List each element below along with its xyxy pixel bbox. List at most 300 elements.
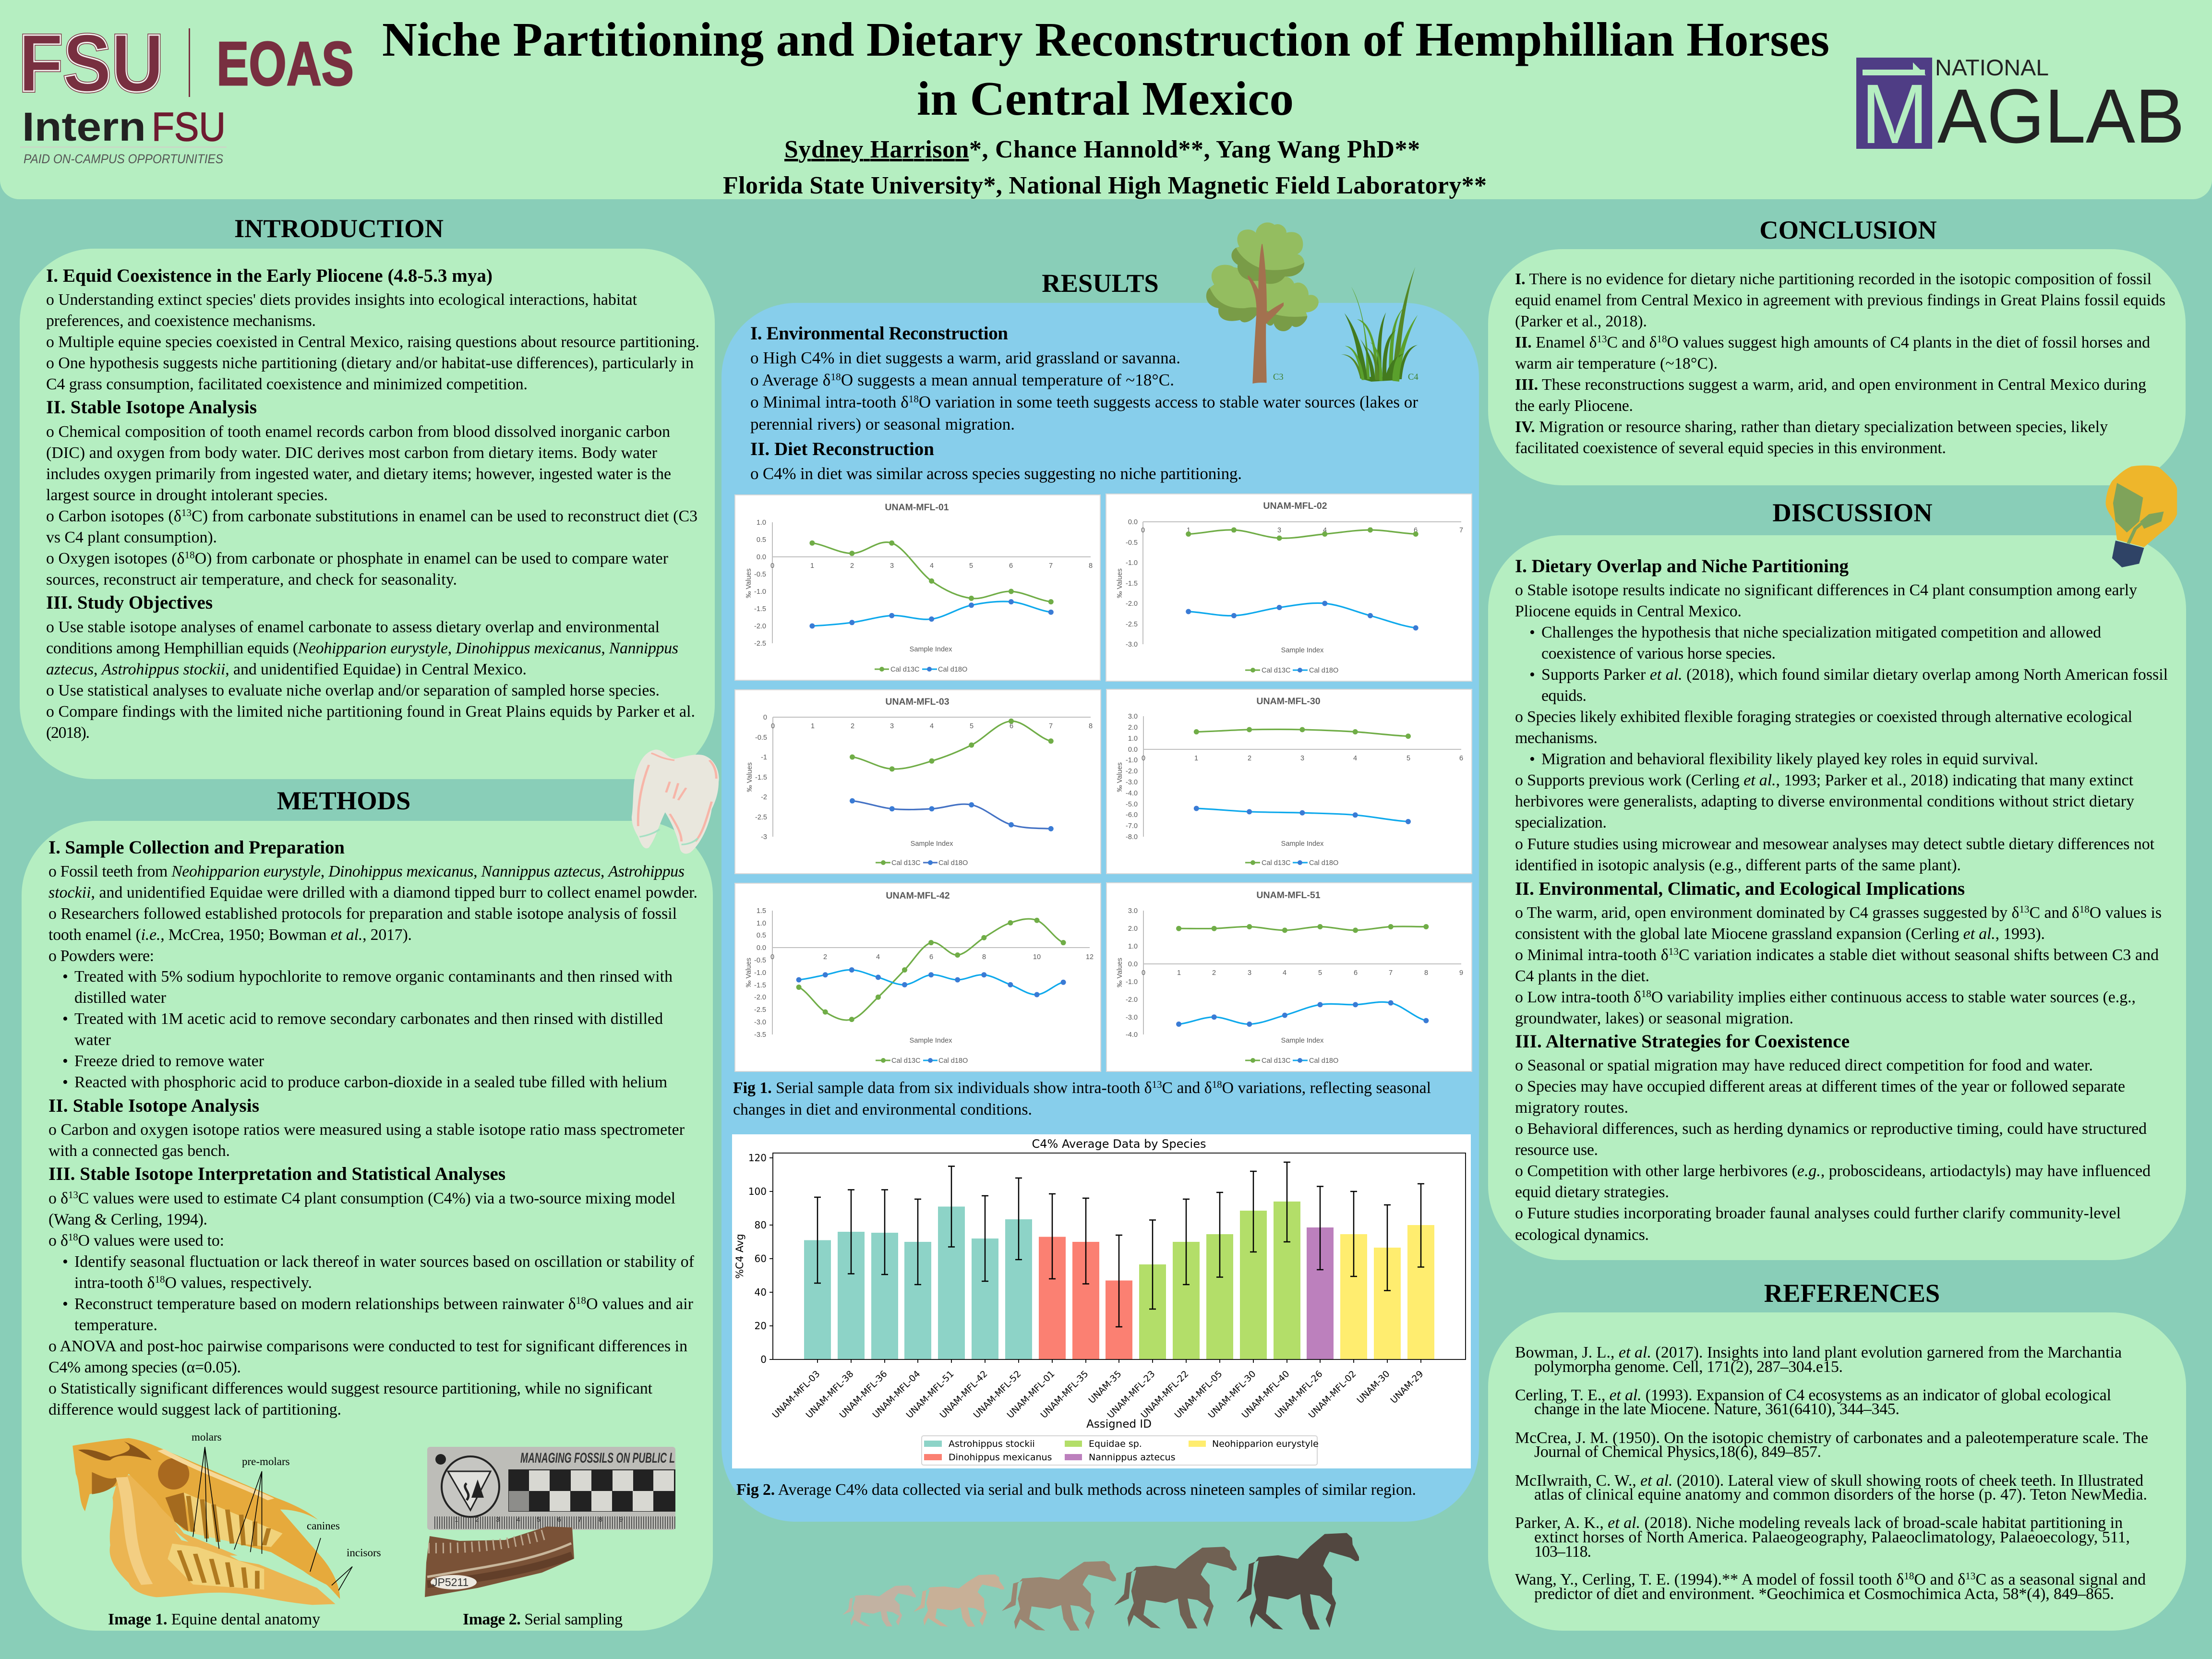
text block: equid coexistence: o Multiple equine species coexisted in Central Mexico, raising questions about resource partitioning.	[46, 333, 699, 351]
caption: image 1: Image 1. Equine dental anatomy	[108, 1611, 320, 1628]
panel: references: 103–118.	[1534, 1543, 1591, 1561]
line chart: UNAM-MFL-51: 0123456789	[1142, 969, 1463, 977]
label: incisors: incisors	[347, 1547, 381, 1559]
text block: sample collection: Treated with 1M acetic acid to remove secondary carbonates and then rinsed with distilled	[74, 1010, 663, 1028]
line chart: UNAM-MFL-42: -3.5	[754, 1031, 766, 1039]
line chart: UNAM-MFL-02: Sample Index	[1281, 647, 1324, 654]
subheading: sample collection: I. Sample Collection and Preparation	[48, 837, 345, 858]
text block: diet reconstruction: o C4% in diet was similar across species suggesting no niche partitioning.	[750, 464, 1242, 483]
image: scale bar and fossil tooth: 123456789	[455, 1515, 623, 1523]
line chart: UNAM-MFL-51: UNAM-MFL-51	[1256, 890, 1321, 901]
text block: interpretation: 13	[68, 1189, 78, 1201]
panel: conclusion: C and δ	[1607, 334, 1657, 351]
text block: environmental reconstruction: o Average δ	[750, 371, 830, 389]
caption: figure 1: C and δ	[1162, 1079, 1212, 1097]
x axis tick labels: UNAM-MFL-40	[1240, 1369, 1292, 1420]
line chart: UNAM-MFL-30: -5.0	[1126, 801, 1138, 808]
line chart: UNAM-MFL-02: -2.0	[1126, 600, 1138, 608]
x axis tick labels: UNAM-MFL-04	[871, 1369, 923, 1420]
text block: sample collection: o Researchers followed established protocols for preparation and stable isotope analysis of fossil	[48, 905, 677, 923]
line chart: UNAM-MFL-01: ‰ Values	[745, 568, 753, 598]
text block: stable isotope analysis: o Carbon isotopes (δ	[46, 507, 181, 525]
label: molars: molars	[192, 1431, 222, 1443]
text block: interpretation: O values were used to:	[78, 1232, 224, 1250]
line chart: UNAM-MFL-01: Cal d18O	[938, 666, 967, 673]
line chart: UNAM-MFL-51: Sample Index	[1281, 1037, 1324, 1045]
panel: references: polymorpha genome. Cell, 171(2), 287–304.e15.	[1534, 1358, 1843, 1376]
text block: dietary overlap: Supports Parker et al. (2018), which found similar dietary overlap among North American fossil	[1541, 666, 2168, 684]
text block: study objectives: o Use statistical analyses to evaluate niche overlap and/or separation of sampled horse species.	[46, 682, 660, 699]
panel: discussion	[1488, 535, 2186, 1260]
text block: interpretation: 18	[576, 1295, 586, 1306]
text block: environmental implications: groundwater, lakes) or seasonal migration.	[1515, 1010, 1793, 1027]
text block: interpretation: C4% among species (α=0.05).	[48, 1358, 241, 1376]
line chart: UNAM-MFL-01: Sample Index	[910, 646, 952, 653]
text block: environmental reconstruction: O suggests a mean annual temperature of ~18°C.	[841, 371, 1174, 389]
text block: study objectives: aztecus, Astrohippus stockii, and unidentified Equidae) in Central Mexico.	[46, 661, 527, 678]
text block: environmental implications: C4 plants in the diet.	[1515, 967, 1649, 985]
logo: National MagLab	[1856, 55, 2185, 161]
panel: conclusion: equid enamel from Central Mexico in agreement with previous findings in Great Plains fossil equids	[1515, 291, 2165, 309]
subheading: stable isotope analysis: II. Stable Isotope Analysis	[48, 1095, 259, 1116]
text block: stable isotope analysis: vs C4 plant consumption).	[46, 529, 217, 546]
text block: interpretation: Reconstruct temperature based on modern relationships between rainwater δ	[74, 1295, 576, 1313]
text block: equid coexistence: preferences, and coexistence mechanisms.	[46, 312, 316, 330]
subheading: alternative strategies: III. Alternative Strategies for Coexistence	[1515, 1031, 1850, 1052]
text block: sample collection: o Fossil teeth from Neohipparion eurystyle, Dinohippus mexicanus, Nannippus aztecus, Astrohippus	[48, 863, 685, 880]
text block: dietary overlap: •	[1529, 750, 1535, 768]
text block: environmental reconstruction: 18	[830, 371, 841, 383]
icon: tree C3	[1206, 222, 1319, 384]
x axis tick labels: UNAM-MFL-05	[1173, 1369, 1225, 1420]
error bars	[814, 1162, 1424, 1327]
text block: study objectives	[46, 618, 695, 742]
line chart: UNAM-MFL-51: 3.0	[1128, 907, 1138, 915]
text block: stable isotope analysis: 13	[181, 507, 192, 518]
label: C4: C4	[1408, 373, 1419, 382]
caption: figure 2: Fig 2. Average C4% data collected via serial and bulk methods across nineteen samples of similar region.	[736, 1481, 1416, 1499]
x axis tick labels	[770, 1369, 1426, 1420]
logo: InternFSU	[20, 104, 227, 166]
line chart: UNAM-MFL-30: -3.0	[1126, 779, 1138, 786]
heading: conclusion: CONCLUSION	[1759, 215, 1937, 244]
panel: references: extinct horses of North America. Palaeogeography, Palaeoclimatology, Palaeoecology, 511,	[1534, 1528, 2130, 1546]
text block: stable isotope analysis: sources, reconstruct air temperature, and check for seasonality.	[46, 571, 457, 589]
text block: environmental implications: o The warm, arid, open environment dominated by C4 grasses suggested by δ	[1515, 904, 2019, 922]
text block: dietary overlap: o Stable isotope results indicate no significant differences in C4 plant consumption among early	[1515, 581, 2137, 599]
subheading: study objectives: III. Study Objectives	[46, 592, 213, 613]
text block: interpretation: •	[62, 1253, 68, 1271]
caption: figure 1: 13	[1152, 1079, 1162, 1090]
text block: sample collection: stockii, and unidentified Equidae were drilled with a diamond tipped burr to collect enamel powder.	[48, 884, 697, 902]
text block: environmental reconstruction: o High C4% in diet suggests a warm, arid grassland or savanna.	[750, 349, 1180, 367]
text block: environmental reconstruction: O variation in some teeth suggests access to stable water sources (lakes or	[919, 393, 1418, 411]
logo: InternFSU: PAID ON-CAMPUS OPPORTUNITIES	[24, 152, 223, 166]
text block: sample collection: water	[74, 1031, 111, 1049]
line chart: UNAM-MFL-30: -6.0	[1126, 811, 1138, 819]
line chart: UNAM-MFL-30: UNAM-MFL-30	[1256, 696, 1321, 707]
text block: interpretation: (Wang & Cerling, 1994).	[48, 1211, 207, 1228]
text block: sample collection: •	[62, 1073, 68, 1091]
line chart: UNAM-MFL-42: 8	[982, 953, 986, 961]
line chart: UNAM-MFL-30	[1106, 689, 1472, 874]
panel: references: Parker, A. K., et al. (2018). Niche modeling reveals lack of broad-scale habitat partitioning in	[1515, 1514, 2123, 1532]
text block: interpretation: •	[62, 1295, 68, 1313]
text block: dietary overlap: Pliocene equids in Central Mexico.	[1515, 602, 1742, 620]
x axis tick labels: UNAM-MFL-03	[770, 1369, 822, 1420]
text block: environmental implications: 13	[2019, 903, 2029, 915]
line chart: UNAM-MFL-42: 6	[929, 953, 933, 961]
panel: references: C as a seasonal signal and	[1975, 1571, 2146, 1588]
x axis tick labels: UNAM-MFL-22	[1139, 1369, 1191, 1420]
bars: Equidae sp.	[1139, 1202, 1300, 1359]
text block: mass spectrometer: o Carbon and oxygen isotope ratios were measured using a stable isotope ratio mass spectrometer	[48, 1121, 685, 1139]
y axis tick labels: 40	[755, 1286, 767, 1298]
bars: Nannippus aztecus	[1307, 1227, 1334, 1359]
panel: references: Wang, Y., Cerling, T. E. (1994).** A model of fossil tooth δ	[1515, 1571, 1904, 1588]
line chart: UNAM-MFL-01: 012345678	[770, 562, 1093, 570]
panel: conclusion: II. Enamel δ	[1515, 334, 1597, 351]
line chart: UNAM-MFL-42	[735, 883, 1101, 1071]
line chart: UNAM-MFL-03: -3	[761, 833, 767, 841]
line chart: UNAM-MFL-51: Cal d13C	[1262, 1057, 1290, 1065]
text block: environmental implications: 18	[2080, 903, 2090, 915]
line chart: UNAM-MFL-30: -1.0	[1126, 757, 1138, 764]
text block: alternative strategies: migratory routes.	[1515, 1099, 1628, 1117]
text block: study objectives: (2018).	[46, 724, 90, 742]
subheading: environmental implications: II. Environmental, Climatic, and Ecological Implications	[1515, 878, 1965, 899]
line chart: UNAM-MFL-03: 0	[763, 714, 767, 721]
line chart: UNAM-MFL-42: -2.0	[754, 994, 766, 1001]
line chart: UNAM-MFL-42: 2	[823, 953, 827, 961]
subheading: dietary overlap: I. Dietary Overlap and Niche Partitioning	[1515, 556, 1849, 577]
text block: alternative strategies: o Behavioral differences, such as herding dynamics or reproductive timing, could have structured	[1515, 1120, 2147, 1138]
line chart: UNAM-MFL-02: Cal d18O	[1309, 667, 1338, 674]
icon: light bulb with plant	[2105, 466, 2177, 567]
bars: Neohipparion eurystyle	[1340, 1225, 1434, 1359]
chart title: C4% Average Data by Species	[1032, 1137, 1206, 1151]
heading: methods: METHODS	[277, 786, 410, 815]
text block: interpretation: o Statistically significant differences would suggest resource partitioning, while no significant	[48, 1380, 653, 1397]
line chart: UNAM-MFL-01	[735, 495, 1100, 680]
text block: stable isotope analysis: 18	[185, 549, 195, 561]
panel: conclusion: IV. Migration or resource sharing, rather than dietary specialization between species, likely	[1515, 418, 2108, 436]
line chart: UNAM-MFL-42: Cal d13C	[891, 1057, 920, 1065]
title: Niche Partitioning and Dietary Reconstruction of Hemphillian Horses	[382, 12, 1829, 66]
label: C3: C3	[1273, 373, 1284, 382]
line chart: UNAM-MFL-51: -4.0	[1126, 1031, 1138, 1039]
heading: references: REFERENCES	[1764, 1278, 1940, 1308]
logo: InternFSU: FSU	[152, 104, 226, 149]
image: scale bar and fossil tooth: JP5211	[432, 1576, 469, 1588]
title: in Central Mexico	[917, 72, 1294, 125]
text block: alternative strategies: o Species may have occupied different areas at different times of the year or followed separate	[1515, 1078, 2125, 1095]
x axis tick labels: UNAM-MFL-30	[1206, 1369, 1258, 1420]
line chart: UNAM-MFL-30: -4.0	[1126, 790, 1138, 797]
text block: stable isotope analysis: (DIC) and oxygen from body water. DIC derives most carbon from dietary items. Body water	[46, 444, 657, 462]
line chart: UNAM-MFL-01: -1.0	[754, 588, 766, 596]
text block: study objectives: o Compare findings with the limited niche partitioning found in Great Plains equids by Parker et al.	[46, 703, 695, 721]
text block: interpretation: O values, respectively.	[165, 1274, 312, 1292]
text block: equid coexistence: o One hypothesis suggests niche partitioning (dietary and/or habitat-use differences), particularly in	[46, 354, 694, 372]
text block: dietary overlap: o Future studies using microwear and mesowear analyses may detect subtle dietary differences not	[1515, 835, 2155, 853]
line chart: UNAM-MFL-03	[735, 690, 1101, 874]
x axis tick labels: UNAM-MFL-23	[1106, 1369, 1157, 1420]
authors: Sydney Harrison*, Chance Hannold**, Yang Wang PhD**	[784, 136, 1420, 163]
text block: interpretation: o δ	[48, 1232, 68, 1250]
subheading: diet reconstruction: II. Diet Reconstruction	[750, 439, 934, 459]
text block: environmental implications: 13	[1669, 946, 1679, 957]
legend: Equidae sp.	[1089, 1439, 1142, 1449]
x axis tick labels: UNAM-MFL-42	[938, 1369, 990, 1420]
bars: Astrohippus stockii	[804, 1207, 1032, 1359]
text block: environmental implications: 18	[1641, 988, 1651, 999]
legend: Astrohippus stockii	[949, 1439, 1035, 1449]
text block: alternative strategies	[1515, 1057, 2151, 1244]
text block: mass spectrometer	[48, 1121, 685, 1160]
line chart: UNAM-MFL-30: Sample Index	[1281, 840, 1324, 848]
line chart: UNAM-MFL-42: -3.0	[754, 1019, 766, 1026]
y axis tick labels: 60	[755, 1253, 767, 1264]
panel: references: McIlwraith, C. W., et al. (2010). Lateral view of skull showing roots of cheek teeth. In Illustrated	[1515, 1472, 2143, 1490]
panel: introduction	[20, 249, 715, 779]
text block: sample collection: •	[62, 1010, 68, 1028]
y axis tick labels: 120	[748, 1152, 767, 1164]
line chart: UNAM-MFL-02: -3.0	[1126, 641, 1138, 649]
text block: study objectives: o Use stable isotope analyses of enamel carbonate to assess dietary overlap and environmental	[46, 618, 660, 636]
line chart: UNAM-MFL-42: 0.5	[757, 932, 766, 939]
line chart: UNAM-MFL-01: Cal d13C	[890, 666, 919, 673]
text block: environmental implications	[1515, 903, 2162, 1027]
panel: references: 18	[1904, 1570, 1914, 1582]
heading: introduction: INTRODUCTION	[234, 214, 444, 243]
line chart: UNAM-MFL-30: -2.0	[1126, 768, 1138, 775]
line chart: UNAM-MFL-42: 0.0	[757, 944, 766, 952]
text block: study objectives: conditions among Hemphillian equids (Neohipparion eurystyle, Dinohippus mexicanus, Nannippus	[46, 639, 678, 657]
line chart: UNAM-MFL-02: -1.5	[1126, 580, 1138, 588]
panel: references: Journal of Chemical Physics,18(6), 849–857.	[1534, 1443, 1821, 1461]
line chart: UNAM-MFL-02: -1.0	[1126, 559, 1138, 567]
text block: dietary overlap: herbivores were generalists, adapting to diverse environmental conditions without strict dietary	[1515, 793, 2134, 810]
panel: conclusion: (Parker et al., 2018).	[1515, 313, 1647, 330]
x axis tick labels: UNAM-MFL-26	[1273, 1369, 1325, 1420]
text block: sample collection: Reacted with phosphoric acid to produce carbon-dioxide in a sealed tube filled with helium	[74, 1073, 667, 1091]
text block: sample collection: Treated with 5% sodium hypochlorite to remove organic contaminants and then rinsed with	[74, 968, 673, 986]
panel: references: Cerling, T. E., et al. (1993). Expansion of C4 ecosystems as an indicator of global ecological	[1515, 1386, 2111, 1404]
icon: tooth	[632, 749, 719, 854]
text block: environmental implications: o Minimal intra-tooth δ	[1515, 946, 1669, 964]
line chart: UNAM-MFL-03: Cal d18O	[938, 859, 968, 867]
y axis label: %C4 Avg	[734, 1234, 745, 1279]
text block: interpretation: difference would suggest lack of partitioning.	[48, 1401, 341, 1419]
line chart: UNAM-MFL-01: 0.5	[757, 536, 766, 544]
x axis tick labels: UNAM-35	[1087, 1369, 1124, 1406]
text block: dietary overlap: Challenges the hypothesis that niche specialization mitigated competition and allowed	[1541, 624, 2101, 641]
line chart: UNAM-MFL-03: -2	[761, 793, 767, 801]
text block: stable isotope analysis: o Oxygen isotopes (δ	[46, 550, 185, 567]
line chart: UNAM-MFL-02	[1106, 494, 1472, 681]
line chart: UNAM-MFL-01: -2.5	[754, 640, 766, 648]
text block: environmental reconstruction	[750, 349, 1418, 433]
logo: InternFSU: Intern	[22, 104, 146, 149]
logo: FSU EOAS: FSU	[19, 18, 164, 109]
line chart: UNAM-MFL-30: ‰ Values	[1116, 762, 1124, 792]
text block: equid coexistence: C4 grass consumption, facilitated coexistence and minimized competition.	[46, 375, 528, 393]
caption: figure 1: O variations, reflecting seasonal	[1222, 1079, 1431, 1097]
line chart: UNAM-MFL-30: Cal d13C	[1262, 859, 1290, 867]
text block: dietary overlap: Migration and behavioral flexibility likely played key roles in equid survival.	[1541, 750, 2038, 768]
image: scale bar and fossil tooth	[425, 1447, 675, 1597]
line chart: UNAM-MFL-30: 0.0	[1128, 746, 1138, 754]
bars: Dinohippus mexicanus	[1039, 1237, 1132, 1359]
caption: figure 1: Fig 1. Serial sample data from six individuals show intra-tooth δ	[733, 1079, 1152, 1097]
image: scale bar and fossil tooth: MANAGING FOSSILS ON PUBLIC L	[520, 1450, 675, 1466]
caption: figure 1: changes in diet and environmental conditions.	[733, 1101, 1032, 1118]
panel: references: atlas of clinical equine anatomy and common disorders of the horse (p. 47). Teton NewMedia.	[1534, 1486, 2147, 1503]
text block: stable isotope analysis: includes oxygen primarily from ingested water, and dietary items; however, ingested water is the	[46, 465, 671, 483]
text block: interpretation: temperature.	[74, 1316, 157, 1334]
line chart: UNAM-MFL-30: -8.0	[1126, 833, 1138, 841]
text block: sample collection: tooth enamel (i.e., McCrea, 1950; Bowman et al., 2017).	[48, 926, 412, 944]
panel: conclusion: the early Pliocene.	[1515, 397, 1633, 415]
text block: stable isotope analysis: o Chemical composition of tooth enamel records carbon from blood dissolved inorganic carbon	[46, 423, 670, 441]
text block: equid coexistence: o Understanding extinct species' diets provides insights into ecological interactions, habitat	[46, 291, 637, 309]
line chart: UNAM-MFL-02: -2.5	[1126, 621, 1138, 628]
text block: stable isotope analysis	[46, 423, 697, 589]
text block: alternative strategies: o Competition with other large herbivores (e.g., proboscideans, artiodactyls) may have influenced	[1515, 1162, 2151, 1180]
subheading: interpretation: III. Stable Isotope Interpretation and Statistical Analyses	[48, 1164, 505, 1184]
y axis tick labels: 0	[760, 1354, 767, 1365]
text block: alternative strategies: ecological dynamics.	[1515, 1226, 1649, 1244]
line chart: UNAM-MFL-03: UNAM-MFL-03	[885, 697, 950, 707]
caption: figure 1	[733, 1079, 1431, 1118]
line chart: UNAM-MFL-30: 2.0	[1128, 724, 1138, 732]
line chart: UNAM-MFL-01: -2.0	[754, 623, 766, 630]
line chart: UNAM-MFL-30: 0123456	[1142, 755, 1463, 762]
line chart: UNAM-MFL-01: 0.0	[757, 553, 766, 561]
y axis tick labels: 100	[748, 1186, 767, 1197]
y axis tick labels: 20	[755, 1320, 767, 1332]
text block: dietary overlap: o Species likely exhibited flexible foraging strategies or coexisted through alternative ecological	[1515, 708, 2132, 726]
x axis tick labels: UNAM-MFL-52	[972, 1369, 1023, 1420]
text block: interpretation: O values and air	[586, 1295, 693, 1313]
line chart: UNAM-MFL-01: -0.5	[754, 571, 766, 578]
panel: references: change in the late Miocene. Nature, 361(6410), 344–345.	[1534, 1400, 1899, 1418]
text block: dietary overlap	[1515, 581, 2168, 874]
line chart: UNAM-MFL-01: UNAM-MFL-01	[885, 502, 949, 513]
text block: interpretation	[48, 1189, 695, 1419]
text block: interpretation: Identify seasonal fluctuation or lack thereof in water sources based on oscillation or stability of	[74, 1253, 695, 1271]
text block: stable isotope analysis: largest source in drought intolerant species.	[46, 486, 328, 504]
line chart: UNAM-MFL-42: 10	[1033, 953, 1041, 961]
title	[382, 12, 1829, 125]
logo: National MagLab: M	[1861, 67, 1928, 161]
line chart: UNAM-MFL-02: Cal d13C	[1262, 667, 1290, 674]
text block: equid coexistence	[46, 291, 699, 393]
line chart: UNAM-MFL-42: -1.5	[754, 982, 766, 989]
x axis tick labels: UNAM-MFL-35	[1039, 1369, 1091, 1420]
subheading: equid coexistence: I. Equid Coexistence in the Early Pliocene (4.8-5.3 mya)	[46, 265, 493, 286]
caption: figure 1: 18	[1212, 1079, 1222, 1090]
line chart: UNAM-MFL-42: -1.0	[754, 969, 766, 977]
text block: environmental reconstruction: perennial rivers) or seasonal migration.	[750, 415, 1015, 433]
text block: alternative strategies: resource use.	[1515, 1141, 1598, 1159]
text block: interpretation: o δ	[48, 1190, 68, 1207]
line chart: UNAM-MFL-02: ‰ Values	[1116, 568, 1124, 598]
text block: environmental reconstruction: 18	[909, 393, 919, 405]
line chart: UNAM-MFL-30: -7.0	[1126, 822, 1138, 830]
x axis label: Assigned ID	[1086, 1418, 1152, 1431]
line chart: UNAM-MFL-42: Cal d18O	[938, 1057, 968, 1065]
text block: sample collection	[48, 863, 697, 1091]
text block: interpretation: 18	[155, 1274, 165, 1285]
icon: grass C4	[1341, 267, 1418, 382]
line chart: UNAM-MFL-42: -2.5	[754, 1006, 766, 1014]
text block: dietary overlap: coexistence of various horse species.	[1541, 645, 1776, 662]
text block: alternative strategies: equid dietary strategies.	[1515, 1183, 1669, 1201]
line chart: UNAM-MFL-03: -2.5	[755, 814, 767, 821]
panel: conclusion: I. There is no evidence for dietary niche partitioning recorded in the isotopic composition of fossil	[1515, 270, 2152, 288]
line chart: UNAM-MFL-42: UNAM-MFL-42	[886, 890, 950, 901]
panel: references	[1488, 1312, 2186, 1631]
text block: environmental implications: O variability implies either continuous access to stable water sources (e.g.,	[1651, 988, 2136, 1006]
y axis tick labels: 80	[755, 1219, 767, 1231]
text block: dietary overlap: mechanisms.	[1515, 729, 1598, 747]
panel: conclusion: 18	[1657, 333, 1667, 345]
text block: interpretation: intra-tooth δ	[74, 1274, 155, 1292]
line chart: UNAM-MFL-02: UNAM-MFL-02	[1263, 501, 1327, 511]
x axis tick labels: UNAM-30	[1355, 1369, 1392, 1406]
line chart: UNAM-MFL-03: -0.5	[755, 734, 767, 742]
panel: conclusion: warm air temperature (~18°C).	[1515, 355, 1718, 373]
x axis tick labels: UNAM-MFL-38	[804, 1369, 856, 1420]
image: equine skull dental anatomy	[72, 1431, 381, 1605]
legend: Nannippus aztecus	[1089, 1452, 1175, 1463]
line chart: UNAM-MFL-42: 12	[1086, 953, 1094, 961]
line chart: UNAM-MFL-02: 0.0	[1128, 518, 1138, 526]
legend	[922, 1436, 1319, 1465]
text block: stable isotope analysis: O) from carbonate or phosphate in enamel can be used to compare water	[195, 550, 668, 567]
line chart: UNAM-MFL-51: ‰ Values	[1116, 958, 1124, 987]
text block: sample collection: •	[62, 1052, 68, 1070]
text block: dietary overlap: equids.	[1541, 687, 1587, 705]
line chart: UNAM-MFL-02: 01234567	[1141, 527, 1463, 534]
logo: FSU EOAS: EOAS	[216, 29, 354, 98]
bar chart: C4% average data by species	[732, 1134, 1471, 1468]
line chart: UNAM-MFL-42: 1.5	[757, 907, 766, 915]
line chart: UNAM-MFL-03: 012345678	[771, 722, 1093, 730]
panel: results	[721, 303, 1479, 1522]
logo: National MagLab: AGLAB	[1937, 73, 2185, 159]
header band	[0, 0, 2212, 199]
caption: image 2: Image 2. Serial sampling	[463, 1611, 623, 1628]
panel: conclusion: 13	[1597, 333, 1607, 345]
text block: interpretation: C values were used to estimate C4 plant consumption (C4%) via a two-source mixing model	[78, 1190, 675, 1207]
panel: references: 13	[1965, 1570, 1975, 1582]
text block: sample collection: distilled water	[74, 989, 166, 1007]
line chart: UNAM-MFL-51: Cal d18O	[1309, 1057, 1338, 1065]
text block: sample collection: •	[62, 968, 68, 986]
line chart: UNAM-MFL-42: -0.5	[754, 957, 766, 964]
affiliations: Florida State University*, National High Magnetic Field Laboratory**	[723, 172, 1487, 199]
text block: environmental implications: C variation indicates a stable diet without seasonal shifts between C3 and	[1679, 946, 2159, 964]
line chart: UNAM-MFL-42: 0	[770, 953, 774, 961]
heading: results: RESULTS	[1042, 268, 1159, 298]
annotation lines	[193, 1447, 352, 1590]
line chart: UNAM-MFL-01: 1.0	[757, 519, 766, 527]
line chart: UNAM-MFL-03: ‰ Values	[746, 762, 754, 792]
line chart: UNAM-MFL-30: 1.0	[1128, 735, 1138, 743]
